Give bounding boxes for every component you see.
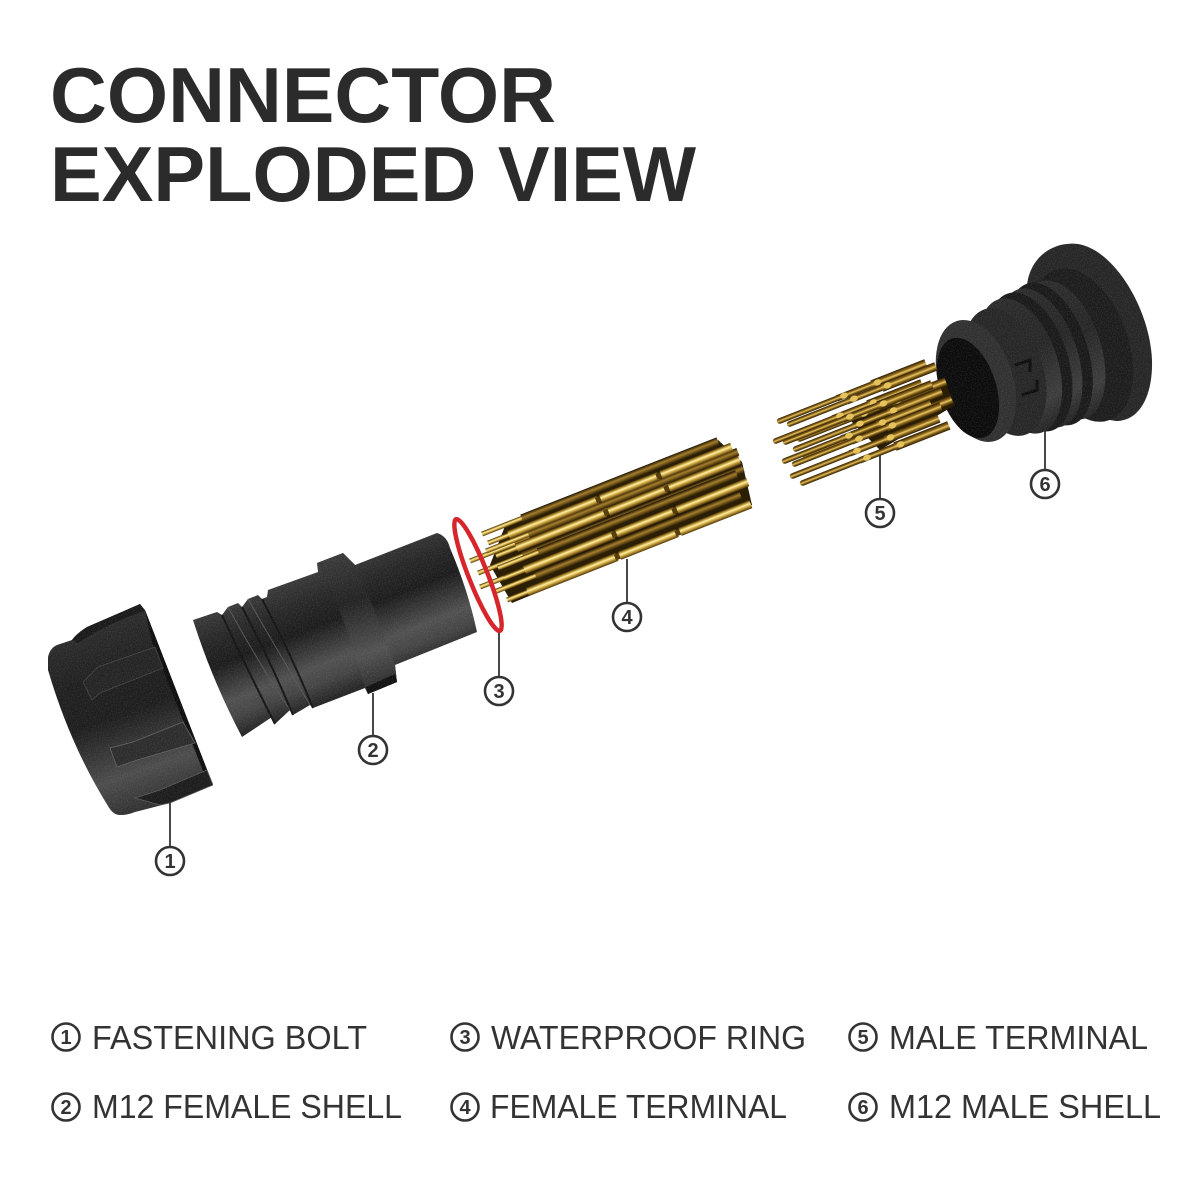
title bbox=[50, 51, 696, 218]
part 6: M12 male shell bbox=[921, 244, 1153, 452]
callout 3 bbox=[485, 633, 513, 705]
callout 6 bbox=[1031, 427, 1059, 498]
legend 3: waterproof ring: 3 bbox=[459, 1027, 471, 1049]
shell grooves bbox=[222, 599, 313, 724]
shell collar band bbox=[317, 553, 397, 694]
callout 1 bbox=[156, 803, 184, 875]
nut grip rib upper bbox=[83, 647, 163, 700]
rim key marks bbox=[1015, 360, 1037, 395]
legend 6: M12 male shell: M12 MALE SHELL bbox=[889, 1088, 1161, 1125]
legend 2: M12 female shell: M12 FEMALE SHELL bbox=[92, 1088, 402, 1125]
legend 3: waterproof ring: WATERPROOF RING bbox=[491, 1019, 806, 1056]
nut front edge bbox=[145, 610, 213, 786]
front rim bbox=[921, 310, 1031, 452]
shell key tab bbox=[366, 674, 397, 694]
thread rings bbox=[948, 270, 1121, 447]
legend 2: M12 female shell: 2 bbox=[60, 1097, 72, 1119]
legend 5: male terminal: 5 bbox=[857, 1027, 869, 1049]
legend 1: fastening bolt: 1 bbox=[60, 1027, 72, 1049]
legend 1: fastening bolt: FASTENING BOLT bbox=[92, 1019, 367, 1056]
callout 3: 3 bbox=[493, 681, 505, 703]
legend 5: male terminal: MALE TERMINAL bbox=[889, 1019, 1148, 1056]
legend 6: M12 male shell: 6 bbox=[857, 1097, 869, 1119]
flange inner shadow bbox=[1011, 254, 1153, 436]
nut grip rib lower bbox=[110, 722, 195, 767]
callout 4: 4 bbox=[621, 607, 633, 629]
callout 2: 2 bbox=[367, 740, 379, 762]
part 4: female terminal bbox=[469, 437, 752, 604]
rear pin rows bbox=[469, 437, 745, 596]
nut outer silhouette bbox=[48, 604, 213, 815]
title: CONNECTOR bbox=[50, 51, 556, 139]
legend 4: female terminal: 4 bbox=[459, 1097, 471, 1119]
pin bundle backing bbox=[490, 440, 752, 603]
callout 5 bbox=[866, 455, 894, 527]
socket opening bbox=[925, 330, 1011, 446]
part 2: M12 female shell bbox=[193, 533, 477, 737]
part 1: fastening bolt bbox=[48, 604, 213, 815]
callout 4 bbox=[613, 559, 641, 631]
callout 1: 1 bbox=[164, 851, 176, 873]
callout 5: 5 bbox=[874, 503, 886, 525]
shell flange bbox=[1027, 244, 1152, 421]
legend 4: female terminal: FEMALE TERMINAL bbox=[490, 1088, 787, 1125]
pin shadow backing bbox=[850, 382, 955, 450]
front pin rows bbox=[486, 443, 752, 604]
title: EXPLODED VIEW bbox=[50, 130, 696, 218]
part 3: waterproof ring bbox=[447, 516, 509, 634]
nut grip rib bottom bbox=[135, 770, 213, 805]
callout 2 bbox=[359, 693, 387, 764]
callout 6: 6 bbox=[1039, 474, 1051, 496]
nut top lip bbox=[72, 604, 145, 643]
part 5: male terminal bbox=[771, 359, 955, 488]
shell silhouette bbox=[193, 533, 477, 737]
